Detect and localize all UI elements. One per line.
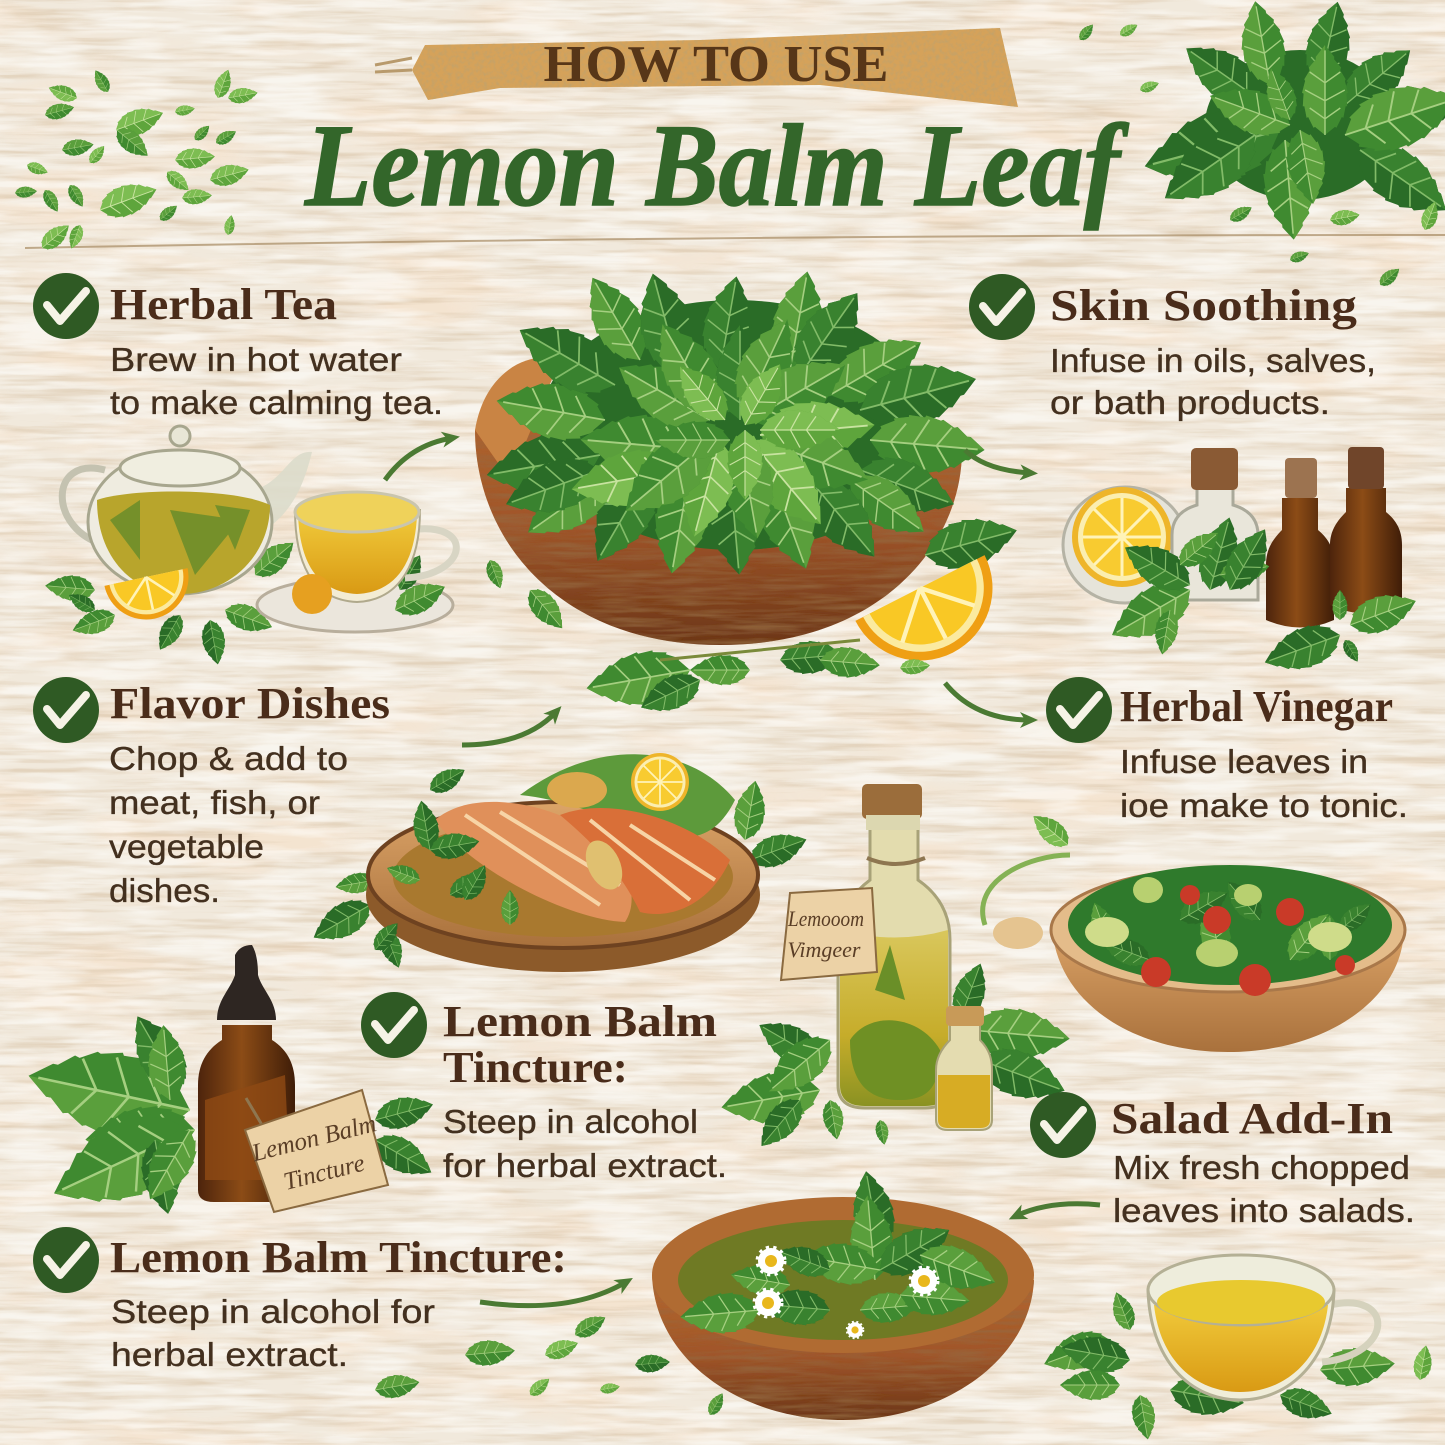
- lemon balm tincture text block bottom: Steep in alcohol for: [111, 1293, 435, 1330]
- check icon: [1046, 677, 1112, 743]
- sprig under bowl: [483, 557, 931, 722]
- leaf cluster top right: [1076, 0, 1445, 290]
- lemon balm tincture text block bottom: Lemon Balm Tincture:: [110, 1233, 567, 1282]
- wooden bowl: [475, 358, 962, 645]
- lemon wedge: [855, 555, 1018, 686]
- lemon balm tincture text block centre: for herbal extract.: [443, 1147, 727, 1184]
- check icon: [361, 992, 427, 1058]
- arrow to teapot: [385, 438, 452, 480]
- herbal vinegar text block: ioe make to tonic.: [1120, 787, 1408, 824]
- herbal tea text block: [33, 273, 443, 421]
- leaf behind lemon wedge: [919, 507, 1023, 578]
- scattered leaves top left: [15, 67, 259, 255]
- tea cup bottom right: [1038, 1255, 1435, 1441]
- wooden bowl of infusion: [652, 1168, 1034, 1420]
- flavor dishes text block: Chop & add to: [109, 740, 348, 777]
- central bowl of lemon balm: [475, 266, 1023, 722]
- lemon balm tincture text block centre: Steep in alcohol: [443, 1103, 698, 1140]
- lemon balm tincture text block centre: [361, 992, 727, 1184]
- flavor dishes text block: vegetable: [109, 828, 264, 865]
- check icon: [33, 273, 99, 339]
- flavor dishes text block: meat, fish, or: [109, 784, 320, 821]
- herbal tea text block: Brew in hot water: [110, 341, 402, 378]
- herbal tea text block: Herbal Tea: [110, 280, 337, 329]
- lemon balm tincture text block centre: Tincture:: [443, 1043, 628, 1092]
- arrow to flavor dishes: [462, 712, 556, 745]
- salad add-in text block: [1030, 1092, 1415, 1229]
- leaf pile: [482, 266, 987, 578]
- skin soothing text block: Infuse in oils, salves,: [1050, 342, 1376, 379]
- flavor dishes text block: Flavor Dishes: [110, 679, 390, 728]
- lemon balm tincture text block bottom: herbal extract.: [111, 1336, 348, 1373]
- salad add-in text block: Mix fresh chopped: [1113, 1149, 1410, 1186]
- sprig above salad: [983, 807, 1075, 949]
- salad add-in text block: Salad Add-In: [1111, 1094, 1393, 1143]
- tincture bottle illustration: Tincture: [281, 1150, 367, 1196]
- flavor dishes text block: dishes.: [109, 872, 220, 909]
- oils and bottles illustration: [1063, 447, 1422, 682]
- herbal tea text block: to make calming tea.: [110, 384, 443, 421]
- tincture bottle illustration: Lemon Balm: [248, 1110, 379, 1167]
- check icon: [33, 1227, 99, 1293]
- arrow from salad text: [1016, 1204, 1100, 1216]
- skin soothing text block: Skin Soothing: [1050, 281, 1357, 330]
- herbal vinegar text block: Herbal Vinegar: [1120, 682, 1393, 731]
- scattered leaves bottom centre: [373, 1310, 728, 1418]
- lemon balm tincture text block bottom: [33, 1227, 567, 1373]
- title: Lemon Balm Leaf: [304, 100, 1130, 231]
- tincture bottle illustration: [20, 945, 440, 1228]
- skin soothing text block: or bath products.: [1050, 384, 1330, 421]
- salad bowl illustration: [1051, 865, 1405, 1052]
- teapot and tea cup illustration: [44, 426, 456, 666]
- salad add-in text block: leaves into salads.: [1113, 1192, 1415, 1229]
- check icon: [969, 274, 1035, 340]
- banner: how to use: [375, 28, 1018, 107]
- skin soothing text block: [969, 274, 1376, 421]
- arrow to soup bowl: [480, 1282, 626, 1306]
- lemon balm tincture text block centre: Lemon Balm: [443, 997, 717, 1046]
- flavor dishes text block: [33, 677, 390, 909]
- vinegar bottle illustration: Vimgeer: [788, 937, 861, 962]
- vinegar bottle illustration: [717, 784, 1072, 1156]
- arrow to skin soothing: [965, 450, 1030, 473]
- check icon: [1030, 1092, 1096, 1158]
- plate of fish with herbs: [305, 753, 812, 972]
- check icon: [33, 677, 99, 743]
- herbal vinegar text block: [1046, 677, 1408, 824]
- arrow to herbal vinegar: [945, 683, 1030, 720]
- vinegar bottle illustration: Lemooom: [787, 906, 864, 931]
- herbal vinegar text block: Infuse leaves in: [1120, 743, 1368, 780]
- banner: how to use: HOW TO USE: [544, 36, 888, 93]
